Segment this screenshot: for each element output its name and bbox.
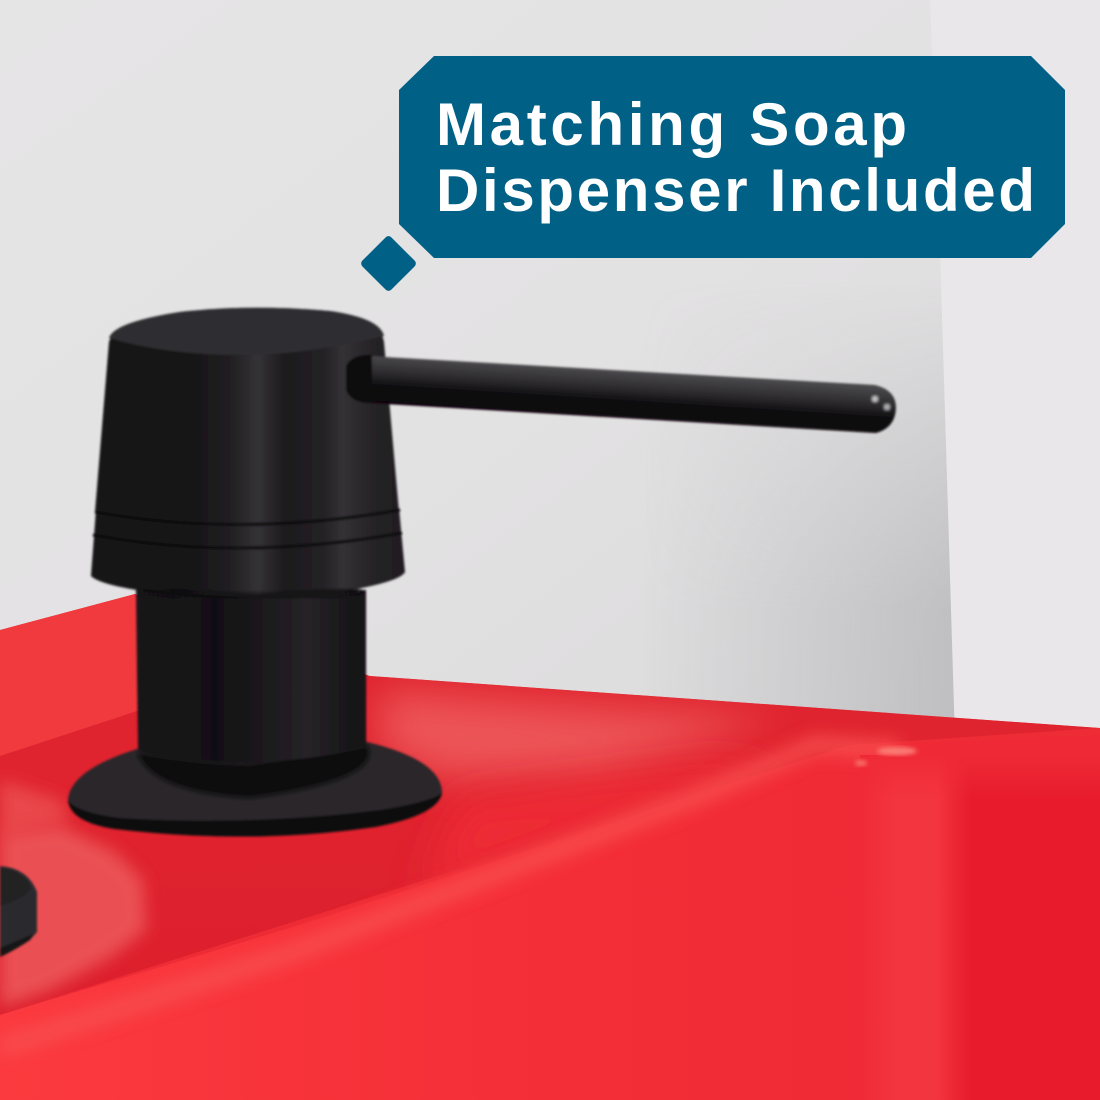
callout banner: [399, 56, 1065, 258]
dispenser head: [95, 308, 399, 524]
front face: [0, 898, 487, 1100]
dispenser collar: [91, 508, 405, 597]
back ledge: [0, 590, 140, 756]
background wall: [471, 281, 954, 718]
rim highlight: [0, 745, 900, 1048]
icon: neighbouring faucet base: [0, 866, 37, 957]
callout pointer diamond: [360, 235, 417, 292]
deck surface: [0, 676, 1100, 1015]
callout heading: Dispenser Included: [436, 157, 1035, 224]
basin shading: [887, 779, 1100, 1100]
callout heading: Matching Soap: [436, 91, 907, 158]
basin highlights: [877, 747, 917, 755]
callout: [360, 56, 1065, 292]
soap dispenser: [68, 308, 896, 837]
deck reflection: [380, 690, 780, 780]
dispenser neck: [136, 590, 366, 762]
red sink: [0, 590, 1100, 1100]
dispenser base plate: [68, 742, 442, 837]
dispenser pump lever: [346, 355, 896, 433]
